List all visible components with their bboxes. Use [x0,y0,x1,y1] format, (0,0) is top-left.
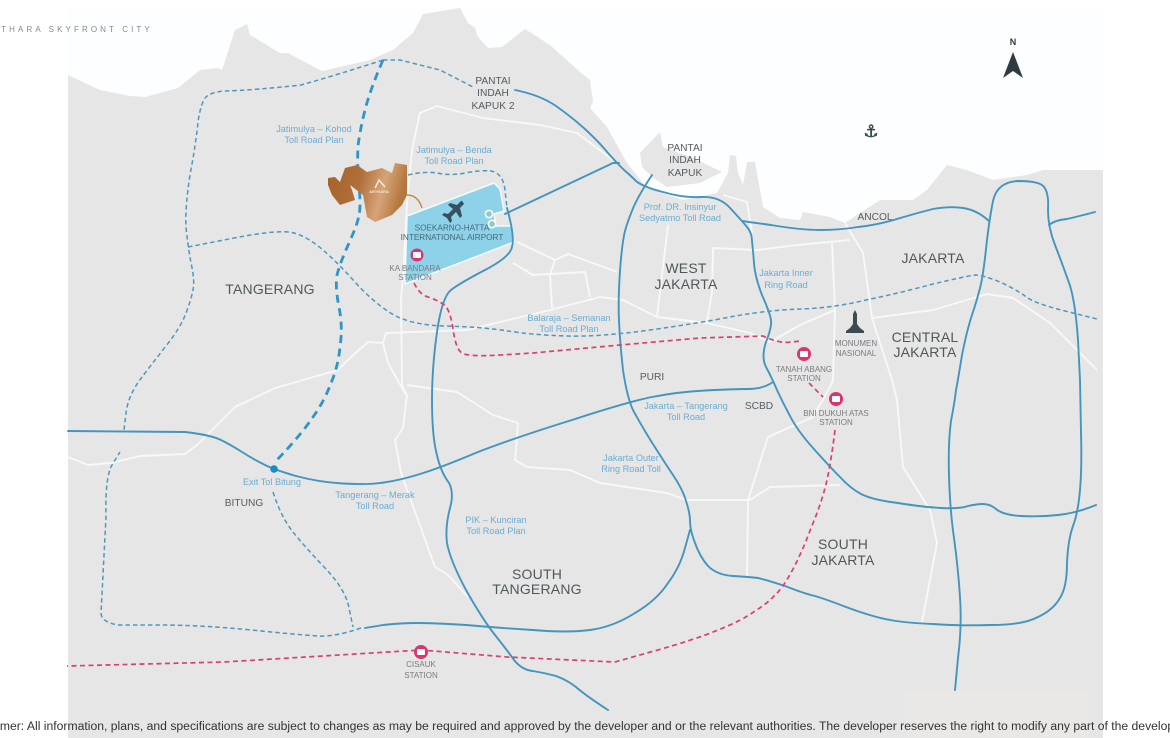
area labels: SOUTH [512,566,562,582]
icon: north arrow: N [1010,37,1016,47]
masterplan site logo [328,163,422,222]
road labels: Exit Tol Bitung [243,477,301,487]
station labels: CISAUK [406,660,437,669]
area labels: ANCOL [857,212,893,223]
road labels: Toll Road [667,412,705,422]
area labels: PANTAI [475,76,511,87]
area labels: CENTRAL [892,329,958,345]
road labels: PIK – Kunciran [465,515,527,525]
station labels [389,264,877,680]
road labels: Jakarta Inner [759,268,813,278]
road labels: Sedyatmo Toll Road [639,213,721,223]
area labels: PURI [640,372,664,383]
white local roads [68,106,1097,622]
area labels: SCBD [745,401,773,412]
road labels: Jakarta – Tangerang [644,401,728,411]
road labels: Jatimulya – Benda [416,145,493,155]
blue toll roads [68,90,1096,710]
area labels: JAKARTA [893,344,957,360]
area labels [225,76,965,597]
road labels: Toll Road Plan [539,324,599,334]
area labels: PANTAI [667,143,703,154]
station labels: STATION [398,273,432,282]
area labels: INDAH [477,88,509,99]
area labels: SOUTH [818,536,868,552]
airport label: SOEKARNO-HATTA [415,224,490,232]
icon: north arrow [1003,37,1023,78]
icon: monument [846,310,864,333]
exit node [270,465,278,473]
station labels: TANAH ABANG [776,365,832,374]
road labels: Tangerang – Merak [335,490,415,500]
rail lines [67,283,835,666]
area labels: KAPUK 2 [471,101,515,112]
area labels: BITUNG [225,498,263,509]
area labels: WEST [665,260,707,276]
bottom right patch [905,690,1088,738]
area labels: JAKARTA [811,552,875,568]
station labels: MONUMEN [835,339,877,348]
airport label [401,224,503,242]
pantai indah kapuk island [640,132,722,187]
area labels: KAPUK [668,168,702,179]
area labels: INDAH [669,155,701,166]
road labels: Ring Road [764,280,808,290]
road labels: Balaraja – Semanan [527,313,611,323]
masterplan site logo: ARTHARA [369,189,389,194]
area labels: JAKARTA [901,250,965,266]
road labels: Jakarta Outer [603,453,659,463]
road labels: Toll Road Plan [466,526,526,536]
road labels: Prof. DR. Insinyur [644,202,716,212]
airport label: INTERNATIONAL AIRPORT [401,233,503,242]
road labels: Jatimulya – Kohod [276,124,352,134]
station labels: KA BANDARA [389,264,441,273]
icon: airplane [442,201,464,223]
station labels: NASIONAL [836,349,877,358]
road labels: Toll Road Plan [424,156,484,166]
area labels: TANGERANG [225,281,315,297]
station labels: STATION [404,671,438,680]
road labels: Ring Road Toll [601,464,661,474]
station labels: STATION [787,374,821,383]
planned toll roads dashed [101,60,1097,636]
road labels: Toll Road [356,501,394,511]
area labels: TANGERANG [492,581,582,597]
station labels: BNI DUKUH ATAS [803,409,869,418]
station labels: STATION [819,418,853,427]
icon: anchor: ⚓ [863,122,879,142]
airport [401,183,514,284]
road labels: Toll Road Plan [284,135,344,145]
area labels: JAKARTA [654,276,718,292]
stations [410,248,843,659]
Jatimulya Kohod thick dashed road [275,60,383,462]
road labels [243,124,813,536]
